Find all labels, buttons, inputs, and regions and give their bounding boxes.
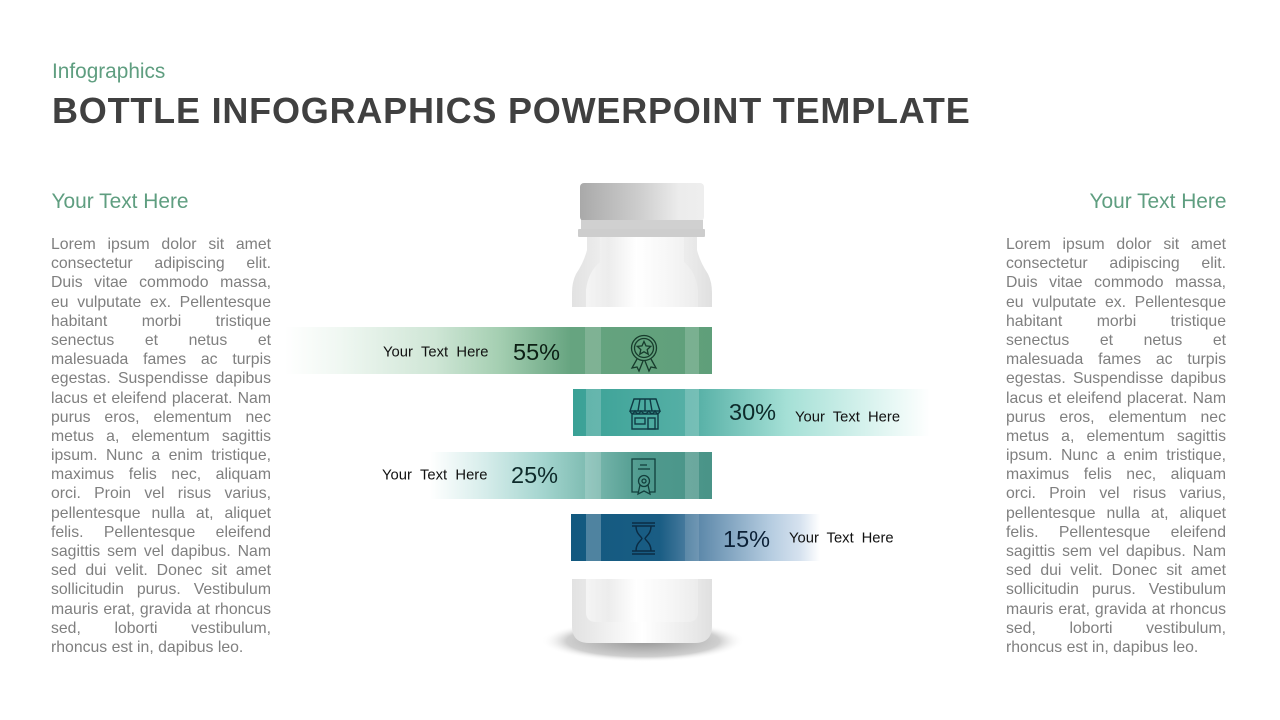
left text block: sed dui velit. Donec sit amet [51, 562, 271, 579]
right text block: habitant morbi tristique [1006, 313, 1226, 330]
right text block: orci. Proin vel risus varius, [1006, 485, 1226, 502]
right text block: lacus et eleifend placerat. Nam [1006, 390, 1226, 406]
left text block: lacus et eleifend placerat. Nam [51, 390, 271, 406]
right heading: Your Text Here [1089, 190, 1226, 213]
right text block: rhoncus est in, dapibus leo. [1006, 639, 1198, 656]
right text block: sagittis sem vel dapibus. Nam [1006, 543, 1226, 560]
left text block: habitant morbi tristique [51, 313, 271, 330]
label: bar 3 text: Your Text Here [382, 468, 487, 484]
right text block: egestas. Suspendisse dapibus [1006, 370, 1226, 387]
left text block: Duis vitae commodo massa, [51, 274, 271, 291]
right text block: sed, loborti vestibulum, [1006, 620, 1226, 637]
left text block: senectus et netus et [51, 332, 271, 349]
left text block: purus eros, elementum nec [51, 409, 271, 426]
left text block: felis. Pellentesque eleifend [51, 524, 271, 541]
right text block: mauris erat, gravida at rhoncus [1006, 601, 1226, 618]
left text block: sed, loborti vestibulum, [51, 620, 271, 637]
right text block: ipsum. Nunc a enim tristique, [1006, 447, 1226, 464]
right text block: maximus felis nec, aliquam [1006, 466, 1226, 483]
left text block: maximus felis nec, aliquam [51, 466, 271, 483]
left text block: pellentesque nulla at, aliquet [51, 505, 271, 522]
right text block: senectus et netus et [1006, 332, 1226, 349]
icon: award ribbon [632, 336, 656, 371]
right text block: felis. Pellentesque eleifend [1006, 524, 1226, 541]
bar 2: 30% [573, 389, 930, 436]
left text block: rhoncus est in, dapibus leo. [51, 639, 243, 656]
icon: storefront [630, 399, 660, 429]
right text block: eu vulputate ex. Pellentesque [1006, 294, 1226, 311]
bottle lower body [572, 579, 712, 643]
bar 1: 55% [285, 327, 712, 374]
left text block: eu vulputate ex. Pellentesque [51, 294, 271, 311]
bar 3: 25% [382, 452, 712, 499]
bottle upper body [572, 237, 712, 307]
left text block: mauris erat, gravida at rhoncus [51, 601, 271, 618]
icon: certificate [632, 459, 655, 494]
right text block: sed dui velit. Donec sit amet [1006, 562, 1226, 579]
icon: hourglass [632, 523, 655, 554]
right text block: purus eros, elementum nec [1006, 409, 1226, 426]
right text block: consectetur adipiscing elit. [1006, 255, 1226, 272]
right text block [1006, 236, 1226, 656]
left text block: consectetur adipiscing elit. [51, 255, 271, 272]
left text block: sagittis sem vel dapibus. Nam [51, 543, 271, 560]
label: bar 1 text: Your Text Here [383, 344, 488, 360]
bottle shadow [541, 620, 745, 662]
title: BOTTLE INFOGRAPHICS POWERPOINT TEMPLATE [52, 90, 971, 131]
left text block: orci. Proin vel risus varius, [51, 485, 271, 502]
bottle cap [578, 183, 705, 237]
right text block: sollicitudin purus. Vestibulum [1006, 581, 1226, 598]
value: 55%: 55% [513, 339, 560, 365]
value: 25%: 25% [511, 462, 558, 488]
left text block [51, 236, 271, 656]
label: bar 2 text: Your Text Here [795, 410, 900, 426]
right text block: malesuada fames ac turpis [1006, 351, 1226, 368]
value: 30%: 30% [729, 399, 776, 425]
value: 15%: 15% [723, 526, 770, 552]
right text block: pellentesque nulla at, aliquet [1006, 505, 1226, 522]
left text block: ipsum. Nunc a enim tristique, [51, 447, 271, 464]
label: bar 4 text: Your Text Here [789, 530, 894, 546]
left text block: malesuada fames ac turpis [51, 351, 271, 368]
right text block: metus a, elementum sagittis [1006, 428, 1226, 445]
left text block: sollicitudin purus. Vestibulum [51, 581, 271, 598]
left text block: metus a, elementum sagittis [51, 428, 271, 445]
left text block: Lorem ipsum dolor sit amet [51, 236, 271, 253]
bar 4: 15% [571, 514, 894, 561]
left text block: egestas. Suspendisse dapibus [51, 370, 271, 387]
right text block: Lorem ipsum dolor sit amet [1006, 236, 1226, 253]
left heading: Your Text Here [52, 190, 189, 213]
subtitle: Infographics [52, 60, 165, 83]
right text block: Duis vitae commodo massa, [1006, 274, 1226, 291]
